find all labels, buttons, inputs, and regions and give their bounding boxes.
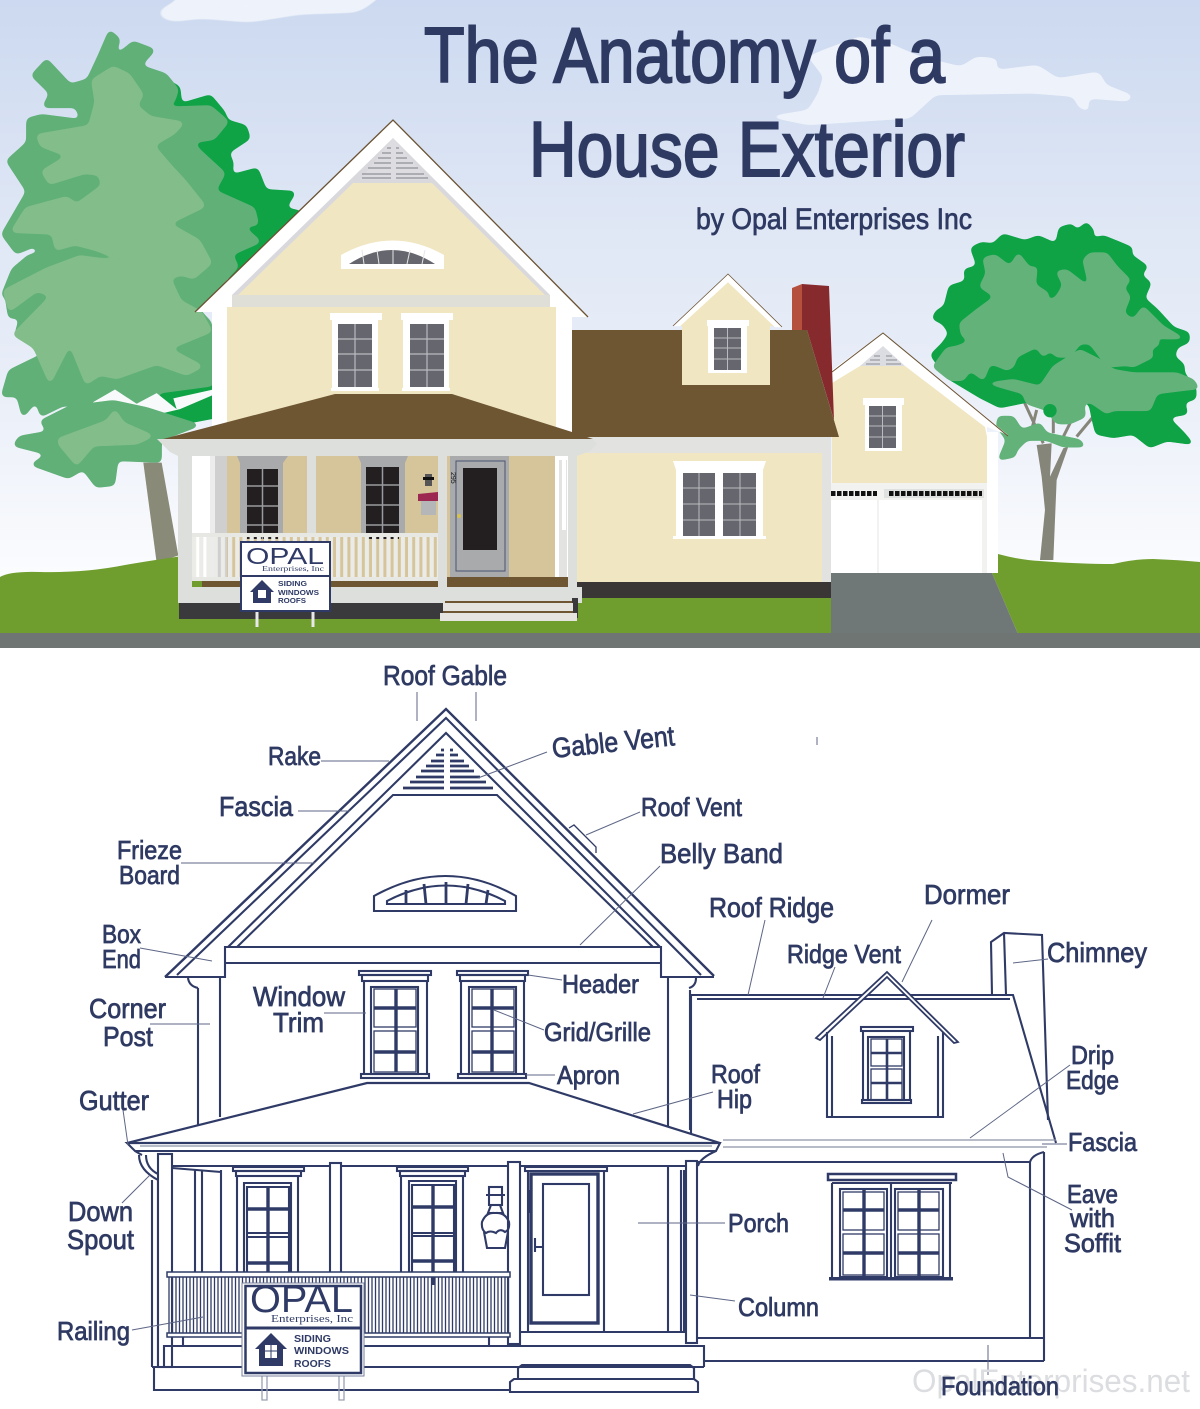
dormer window bbox=[707, 320, 749, 373]
wing ground floor bbox=[570, 437, 831, 598]
sign: scene: WINDOWS bbox=[278, 588, 319, 597]
sign services: SIDING bbox=[294, 1333, 331, 1345]
label: Drip Edge: Edge bbox=[1066, 1065, 1119, 1095]
services text: SIDING bbox=[278, 579, 307, 588]
porch window left bbox=[237, 456, 288, 539]
porch bbox=[157, 394, 597, 621]
label: Box End: Box bbox=[102, 919, 141, 949]
cloud: right bbox=[767, 37, 1132, 125]
label: Header: Header bbox=[562, 969, 639, 999]
chimney bbox=[792, 284, 834, 420]
label: Roof Hip: Roof bbox=[711, 1059, 761, 1089]
label: Eave with Soffit: with bbox=[1069, 1203, 1115, 1233]
subtitle: by Opal Enterprises Inc bbox=[696, 203, 972, 236]
porch columns bbox=[178, 456, 577, 603]
label: Corner Post bbox=[89, 993, 166, 1052]
label: Foundation: Foundation bbox=[941, 1371, 1059, 1401]
door bbox=[450, 456, 509, 577]
label: Eave with Soffit: Soffit bbox=[1064, 1228, 1122, 1258]
driveway bbox=[831, 573, 1018, 634]
label: Eave with Soffit bbox=[1064, 1179, 1122, 1258]
gable vent bbox=[403, 750, 493, 788]
house number: 295 bbox=[449, 472, 456, 484]
porch steps bbox=[440, 601, 577, 621]
label: Fascia right: Fascia bbox=[1068, 1127, 1137, 1157]
porch deck bbox=[178, 587, 582, 603]
label: Gutter: Gutter bbox=[79, 1085, 149, 1116]
label: Chimney: Chimney bbox=[1047, 937, 1147, 968]
upper wall bbox=[227, 307, 556, 432]
garage window bbox=[863, 398, 904, 451]
lantern and planter bbox=[482, 1187, 509, 1248]
logo text: OPAL bbox=[246, 543, 324, 569]
label: Box End bbox=[102, 919, 141, 974]
sign: blueprint: ROOFS bbox=[294, 1358, 331, 1370]
porch fascia bbox=[157, 439, 597, 456]
deck and base bbox=[152, 1346, 704, 1390]
label: Down Spout bbox=[67, 1196, 134, 1255]
porch window right bbox=[358, 456, 408, 539]
label: Corner Post: Post bbox=[103, 1021, 153, 1052]
cloud: top bbox=[145, 0, 400, 22]
sign: blueprint bbox=[242, 1279, 364, 1400]
label: Roof Hip bbox=[711, 1059, 761, 1114]
label: Drip Edge bbox=[1066, 1040, 1119, 1095]
label: Belly Band: Belly Band bbox=[660, 838, 783, 869]
attic vent bbox=[362, 148, 428, 178]
lawn bbox=[0, 554, 1200, 640]
sign: scene: ROOFS bbox=[278, 596, 306, 605]
label: Gable Vent: Gable Vent bbox=[550, 720, 676, 764]
dormer and main roof of wing bbox=[570, 274, 839, 437]
panel: illustrated house scene bbox=[0, 0, 1200, 648]
tree: right bbox=[932, 223, 1198, 560]
sign logo: OPAL bbox=[250, 1279, 353, 1321]
railing bbox=[167, 1272, 510, 1347]
belly band bbox=[232, 295, 550, 307]
panel: labelled blueprint diagram bbox=[57, 660, 1190, 1401]
chimney bbox=[991, 933, 1048, 1120]
railing bbox=[192, 533, 568, 587]
porch foundation bbox=[179, 603, 443, 619]
sign icon bbox=[250, 580, 274, 603]
label: Drip Edge: Drip bbox=[1071, 1040, 1114, 1070]
label: Apron: Apron bbox=[557, 1060, 620, 1090]
labels bbox=[57, 660, 1147, 1401]
label: Roof Hip: Hip bbox=[717, 1084, 752, 1114]
window: upper left bbox=[359, 971, 431, 1078]
road bbox=[0, 633, 1200, 648]
label: Corner Post: Corner bbox=[89, 993, 166, 1024]
fan window bbox=[341, 240, 444, 269]
label: Box End: End bbox=[102, 944, 141, 974]
main house bbox=[195, 120, 588, 437]
label: Roof Vent: Roof Vent bbox=[641, 792, 743, 822]
blueprint: wing bbox=[691, 933, 1056, 1361]
label: Down Spout: Down bbox=[68, 1196, 133, 1227]
label: Roof Gable: Roof Gable bbox=[383, 660, 507, 691]
blueprint: porch bbox=[127, 1083, 720, 1400]
hanging planter bbox=[418, 492, 438, 515]
label: Railing: Railing bbox=[57, 1316, 130, 1346]
label: Ridge Vent: Ridge Vent bbox=[787, 939, 902, 969]
garage bbox=[831, 333, 1008, 573]
label: Frieze Board: Board bbox=[119, 860, 180, 890]
fan window bbox=[374, 876, 516, 911]
blueprint: main gable bbox=[165, 709, 714, 1130]
title bbox=[424, 11, 965, 193]
label: Down Spout: Spout bbox=[67, 1224, 134, 1255]
corner posts bbox=[212, 312, 227, 430]
label: Window Trim: Trim bbox=[273, 1007, 324, 1038]
sign icon bbox=[255, 1333, 287, 1366]
label: Dormer: Dormer bbox=[924, 879, 1010, 910]
title: The Anatomy of a bbox=[424, 11, 946, 99]
label: Window Trim bbox=[253, 981, 346, 1038]
door bbox=[525, 1167, 607, 1332]
window: upper right bbox=[457, 971, 528, 1078]
label: Frieze Board: Frieze bbox=[117, 835, 182, 865]
label: Eave with Soffit: Eave bbox=[1067, 1179, 1118, 1209]
label: Grid/Grille: Grid/Grille bbox=[544, 1017, 651, 1047]
wing window bbox=[673, 461, 766, 539]
porch roof bbox=[163, 394, 593, 439]
label: Frieze Board bbox=[117, 835, 182, 890]
down spout bbox=[139, 1155, 158, 1367]
sign: scene bbox=[241, 542, 330, 627]
label: Fascia: Fascia bbox=[219, 791, 293, 822]
upper window left bbox=[330, 313, 382, 391]
label: Porch: Porch bbox=[728, 1208, 789, 1238]
label: Rake: Rake bbox=[268, 741, 321, 771]
sign: blueprint: WINDOWS bbox=[294, 1345, 349, 1357]
main gable roof bbox=[195, 120, 588, 430]
wall lantern bbox=[423, 474, 434, 486]
sign: blueprint: Enterprises, Inc bbox=[271, 1313, 353, 1325]
corner posts bbox=[198, 977, 690, 1130]
porch columns bbox=[158, 1154, 697, 1367]
sky bbox=[0, 0, 1200, 640]
upper window right bbox=[401, 313, 453, 391]
tree: left bbox=[3, 32, 300, 563]
window: porch right bbox=[397, 1167, 468, 1285]
porch roof bbox=[127, 1083, 720, 1143]
label: Column: Column bbox=[738, 1292, 819, 1322]
watermark: OpalEnterprises.net bbox=[912, 1363, 1190, 1399]
label: Roof Ridge: Roof Ridge bbox=[709, 892, 834, 923]
title: House Exterior bbox=[529, 105, 965, 193]
dormer bbox=[816, 972, 958, 1117]
label: Window Trim: Window bbox=[253, 981, 346, 1012]
sign: scene: Enterprises, Inc bbox=[262, 565, 324, 573]
window: porch left bbox=[233, 1167, 304, 1273]
window: lower wing bbox=[828, 1174, 956, 1280]
steps bbox=[510, 1365, 698, 1392]
leader lines bbox=[122, 692, 1072, 1375]
